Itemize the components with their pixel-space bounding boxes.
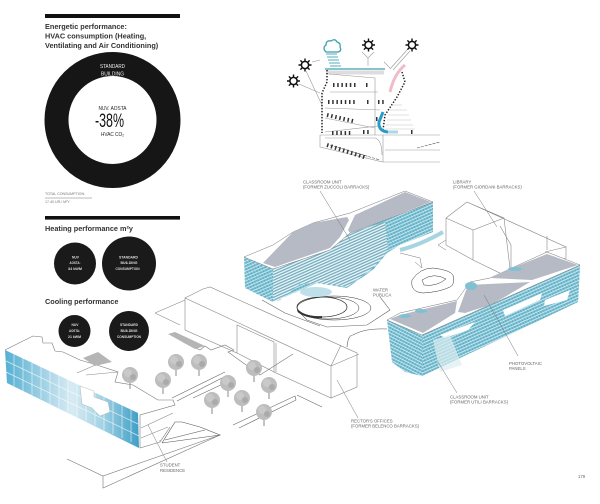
heading: HVAC consumption: HVAC consumption (Heating, [45,32,146,40]
stair hatch [83,332,205,366]
icon: cloud and rain [324,40,341,66]
library wireframe [446,202,566,280]
donut chart: STANDARD [100,64,125,70]
label: classroom unit: CLASSROOM UNIT [303,180,342,184]
heading: HVAC consumption: Ventilating and Air Conditioning) [45,41,159,50]
bubbles: cooling performance: CONSUMPTION [117,335,141,339]
label: rector's offices: (FORMER BELENCO BARRACKS) [351,424,420,428]
bubble: heating standard: STANDARD [119,254,138,260]
panel: energetic performance [45,14,180,204]
trees [122,354,277,426]
label: student residence: STUDENT [160,462,181,468]
donut chart [56,64,168,176]
section diagram [287,38,440,162]
heading: cooling: Cooling performance [45,297,118,306]
label: library: (FORMER GIORDANI BARRACKS) [453,184,522,190]
donut chart: NUV. AOSTA [98,106,127,112]
building outline [320,74,440,162]
icons: sun [287,38,418,88]
label: photovoltaic panels: PHOTOVOLTAIC [509,361,542,366]
bubbles: cooling performance: AOSTA: [69,329,80,333]
bubbles: cooling performance: NUV [72,323,79,327]
landscape contour lines [262,240,454,347]
bubble: heating Nuv Aosta: 34 kWM [68,266,83,271]
label: classroom unit lower: CLASSROOM UNIT [450,394,489,400]
label: classroom unit: (FORMER ZUCCOLI BARRACKS) [303,184,370,190]
donut chart: -38% [95,111,124,132]
label: rector's offices: RECTOR'S OFFICES [351,418,393,424]
line drawing: rector's offices block [5,287,359,488]
heading: HVAC consumption: Energetic performance: [45,22,127,31]
bubbles: cooling performance: 21 kWM [68,335,81,339]
total consumption note: 17.40 UR./ M²Y [45,200,70,204]
page number: 179 [578,474,586,479]
facade stacks [322,70,405,133]
donut chart: HVAC CO₂ [101,132,124,138]
bubble: heating Nuv Aosta: AOSTA: [70,260,80,265]
donut chart: BUILDING [101,72,124,78]
bubble: heating standard [102,236,156,290]
label: student residence: RESIDENCE [160,468,185,473]
building: classroom unit (lower right) [387,252,580,376]
total consumption note: TOTAL CONSUMPTION: [45,192,85,196]
roof line [325,68,385,70]
panel: heating and cooling performance [45,216,180,306]
bubbles: cooling performance [58,311,149,351]
bubble: heating Nuv Aosta [54,242,96,284]
bubbles: cooling performance: STANDARD [120,323,138,327]
heading bar [45,216,180,220]
heading: heating: Heating performance m²y [45,224,134,233]
bubbles: cooling performance: BUILDING [120,329,138,333]
total consumption note [45,192,92,204]
bubble: heating Nuv Aosta: NUV [72,254,79,260]
bubble: heating standard: BUILDING [120,260,138,265]
student residence facade [5,350,139,448]
label: library: LIBRARY [453,180,471,184]
people rows [327,85,413,158]
label: photovoltaic panels: PANELS [509,366,526,371]
label: water tribuna: WATER [373,288,388,292]
warm and cool air flows [390,65,405,92]
heading bar [45,14,180,18]
bubble: heating standard: CONSUMPTION [116,266,140,271]
building: classroom unit (zuccoli) [244,191,443,302]
label: water tribuna: PUBLICA [373,292,392,298]
labels [160,180,586,479]
leader lines [320,191,518,393]
label: classroom unit lower: (FORMER UTILI BARRACKS) [450,400,509,404]
